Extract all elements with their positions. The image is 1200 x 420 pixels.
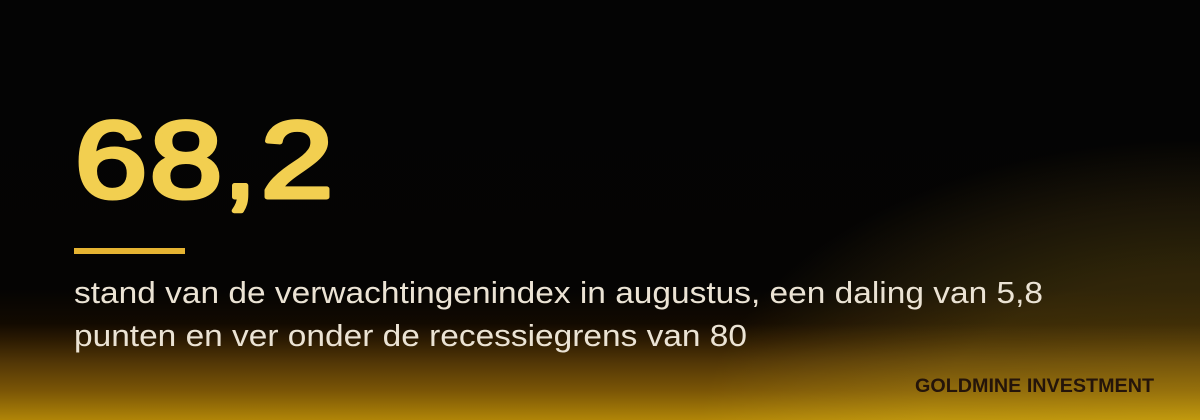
- brand label: GOLDMINE INVESTMENT: [915, 375, 1154, 397]
- description text: punten en ver onder de recessiegrens van 80: [74, 318, 747, 353]
- big number: 8: [150, 99, 222, 220]
- description text: [74, 275, 1043, 353]
- accent rule: [74, 248, 185, 254]
- big number: [75, 99, 333, 220]
- big number: ,: [224, 99, 256, 220]
- description text: stand van de verwachtingenindex in augustus, een daling van 5,8: [74, 275, 1043, 310]
- big number: 6: [75, 99, 147, 220]
- big number: 2: [261, 99, 333, 220]
